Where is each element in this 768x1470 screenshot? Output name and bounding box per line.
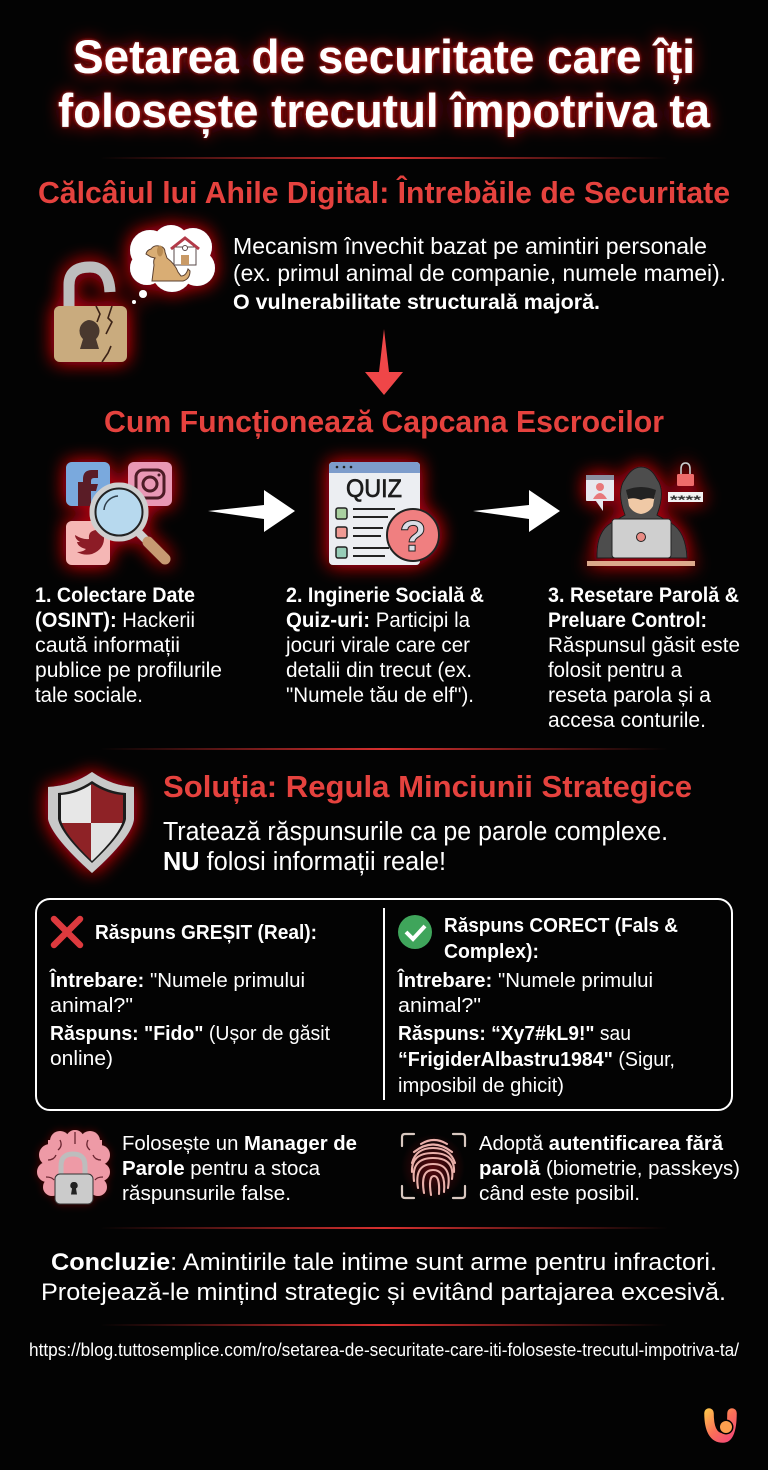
step 1 text: caută informații xyxy=(35,634,180,657)
text: password manager tip: Folosește un Manager de xyxy=(122,1132,357,1155)
correct answer column text: Întrebare: "Numele primului xyxy=(397,968,653,992)
arrow: red down arrow xyxy=(365,329,403,395)
text: solution description: NU folosi informații reale! xyxy=(163,848,446,876)
text: password manager tip: Parole pentru a stoca xyxy=(122,1157,321,1180)
step 3 text xyxy=(548,584,740,732)
text: conclusion: Protejează-le mințind strategic și evitând partajarea excesivă. xyxy=(41,1279,726,1306)
step 2 text: "Numele tău de elf"). xyxy=(286,684,474,707)
step 2 text: 2. Inginerie Socială & xyxy=(286,584,484,607)
step 3 text: 3. Resetare Parolă & xyxy=(548,584,739,607)
correct answer column text: animal?" xyxy=(398,994,481,1017)
step 1 text xyxy=(35,584,222,707)
icon: red X xyxy=(54,919,80,945)
correct answer column text: Complex): xyxy=(444,940,539,963)
icon: brain with padlock xyxy=(37,1130,110,1204)
wrong answer column text: online) xyxy=(50,1047,113,1070)
text: conclusion xyxy=(41,1249,726,1306)
icon: quiz form xyxy=(329,462,439,565)
icon: shield xyxy=(48,772,134,873)
step 2 text: detalii din trecut (ex. xyxy=(286,659,472,682)
step 2 text: Quiz-uri: Participi la xyxy=(286,609,470,632)
icon: quiz form: QUIZ xyxy=(346,475,402,503)
icon: broken padlock with thought bubble xyxy=(54,225,215,362)
text: passwordless tip: parolă (biometrie, passkeys) xyxy=(479,1157,740,1180)
icon: social media with magnifier xyxy=(66,462,172,565)
wrong answer column text: animal?" xyxy=(50,994,133,1017)
text: mechanism description: Mecanism învechit bazat pe amintiri personale xyxy=(233,233,707,259)
icon: quiz form: ? xyxy=(400,512,426,561)
icon: hooded hacker at laptop: **** xyxy=(670,493,702,507)
wrong answer column text: Răspuns GREȘIT (Real): xyxy=(95,921,317,944)
heading: solution: Soluția: Regula Minciunii Strategice xyxy=(163,769,692,804)
wrong answer column text: Întrebare: "Numele primului xyxy=(49,968,305,992)
step 1 text: tale sociale. xyxy=(35,684,143,707)
text: source url: https://blog.tuttosemplice.com/ro/setarea-de-securitate-care-iti-foloseste-trecutul-impotriva-ta/ xyxy=(29,1340,739,1360)
icon: hooded hacker at laptop xyxy=(586,463,703,566)
step 2 text xyxy=(285,584,484,707)
icon: house in thought bubble xyxy=(171,238,199,265)
step 2 text: jocuri virale care cer xyxy=(285,634,470,657)
text: mechanism description: O vulnerabilitate structurală majoră. xyxy=(233,290,600,314)
text: mechanism description xyxy=(233,233,726,314)
icon: logo xyxy=(709,1413,734,1438)
heading: digital achilles heel: Călcâiul lui Ahile Digital: Întrebăile de Securitate xyxy=(38,174,730,210)
correct answer column text: Răspuns: “Xy7#kL9!" sau xyxy=(398,1022,631,1045)
step 1 text: publice pe profilurile xyxy=(35,659,222,682)
title: Setarea de securitate care îți xyxy=(73,30,695,84)
panel: wrong vs correct answers xyxy=(36,899,732,1110)
correct answer column text: imposibil de ghicit) xyxy=(398,1074,564,1097)
step 3 text: Preluare Control: xyxy=(548,609,707,632)
arrow: white arrow 1 xyxy=(208,490,295,532)
icon: fingerprint xyxy=(401,1134,465,1200)
text: password manager tip xyxy=(122,1132,357,1205)
text: passwordless tip: Adoptă autentificarea fără xyxy=(479,1132,724,1155)
step 3 text: Răspunsul găsit este xyxy=(548,634,740,657)
text: conclusion: Concluzie: Amintirile tale intime sunt arme pentru infractori. xyxy=(51,1249,717,1276)
wrong answer column text: Răspuns: "Fido" (Ușor de găsit xyxy=(50,1022,330,1045)
text: passwordless tip: când este posibil. xyxy=(479,1182,640,1205)
step 3 text: reseta parola și a xyxy=(548,684,711,707)
correct answer column text xyxy=(397,914,678,1097)
heading: how the trap works: Cum Funcționează Capcana Escrocilor xyxy=(104,404,664,439)
title xyxy=(58,30,711,138)
step 1 text: (OSINT): Hackerii xyxy=(35,609,195,632)
text: passwordless tip xyxy=(479,1132,740,1205)
step 3 text: folosit pentru a xyxy=(548,659,682,682)
arrow: white arrow 2 xyxy=(473,490,560,532)
icon: green check xyxy=(398,915,432,949)
step 3 text: accesa conturile. xyxy=(548,709,706,732)
text: password manager tip: răspunsurile false. xyxy=(122,1182,291,1205)
text: mechanism description: (ex. primul animal de companie, numele mamei). xyxy=(233,260,726,286)
text: solution description: Tratează răspunsurile ca pe parole complexe. xyxy=(163,818,668,846)
icon: dog in thought bubble xyxy=(146,246,190,281)
step 1 text: 1. Colectare Date xyxy=(35,584,195,607)
correct answer column text: “FrigiderAlbastru1984" (Sigur, xyxy=(398,1048,675,1071)
wrong answer column text xyxy=(49,921,330,1070)
title: folosește trecutul împotriva ta xyxy=(58,84,711,138)
text: solution description xyxy=(163,818,668,876)
correct answer column text: Răspuns CORECT (Fals & xyxy=(444,914,678,937)
